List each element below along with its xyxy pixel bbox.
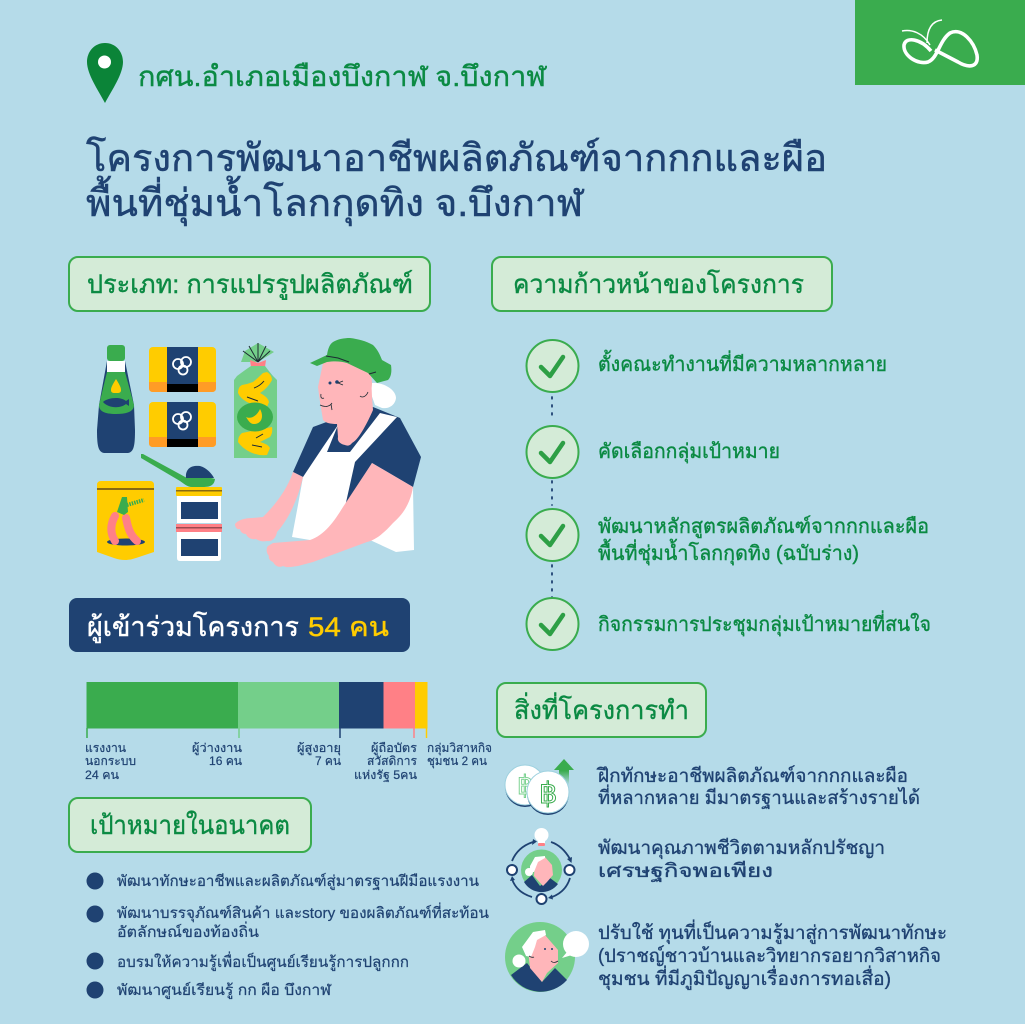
face details xyxy=(328,382,332,384)
list: future goals: อัตลักษณ์ของท้องถิ่น xyxy=(117,921,259,941)
heading: category: ประเภท: การแปรรูปผลิตภัณฑ์ xyxy=(87,269,413,300)
heading: future goals xyxy=(69,798,311,852)
bar label: welfare card holders xyxy=(354,741,418,782)
heading: future goals: เป้าหมายในอนาคต xyxy=(90,810,290,840)
banner: participants: ผู้เข้าร่วมโครงการ xyxy=(87,612,299,643)
step 4: กิจกรรมการประชุมกลุ่มเป้าหมายที่สนใจ xyxy=(598,610,931,637)
step 3: พื้นที่ชุ่มน้ำโลกกุดทิง (ฉบับร่าง) xyxy=(598,539,859,566)
bar label: elderly: ผู้สูงอายุ xyxy=(297,741,341,756)
step 3: พัฒนาหลักสูตรผลิตภัณฑ์จากกกและผือ xyxy=(598,515,929,539)
apron xyxy=(292,413,414,552)
heading: what the project does xyxy=(497,683,706,737)
step 1: ตั้งคณะทำงานที่มีความหลากหลาย xyxy=(598,350,887,376)
icon: coins with arrow xyxy=(505,759,574,815)
bar label: welfare card holders: สวัสดิการ xyxy=(367,754,418,768)
bar label: welfare card holders: แห่งรัฐ 5คน xyxy=(354,768,417,782)
bar label: unemployed: ผู้ว่างงาน xyxy=(192,741,242,756)
action text 1: ที่หลากหลาย มีมาตรฐานและสร้างรายได้ xyxy=(598,784,920,809)
title: โครงการพัฒนาอาชีพผลิตภัณฑ์จากกกและผือ xyxy=(86,136,827,180)
step 2 xyxy=(526,426,780,478)
bar label: informal workers: 24 คน xyxy=(85,768,119,782)
left arm and hand xyxy=(235,472,303,541)
ear xyxy=(362,373,372,396)
banner: participants: 54 คน xyxy=(308,612,389,642)
icon: jars xyxy=(176,487,222,561)
body shirt xyxy=(293,407,421,507)
icon: box two xyxy=(149,402,216,447)
title xyxy=(86,136,827,226)
heading: category xyxy=(69,257,430,311)
bar label: elderly: 7 คน xyxy=(315,754,341,768)
list: future goals: อบรมให้ความรู้เพื่อเป็นศูนย์เรียนรู้การปลูกกก xyxy=(117,951,409,971)
step 4 xyxy=(526,598,931,650)
bar label: community enterprise xyxy=(427,741,492,769)
icon: location pin xyxy=(87,43,123,103)
action text 1: ฝึกทักษะอาชีพผลิตภัณฑ์จากกกและผือ xyxy=(596,765,908,787)
icon: coins with arrow: ฿ xyxy=(539,778,557,810)
illustration: woman in apron xyxy=(235,338,421,567)
hat xyxy=(310,338,391,383)
icon: tamarind pouch xyxy=(97,481,154,560)
location heading: กศน.อำเภอเมืองบึงกาฬ จ.บึงกาฬ xyxy=(138,61,547,92)
icon: banana snack bag xyxy=(234,343,277,458)
bar label: welfare card holders: ผู้ถือบัตร xyxy=(371,741,418,756)
heading: what the project does: สิ่งที่โครงการทำ xyxy=(514,692,689,725)
action text 3: ปรับใช้ ทุนที่เป็นความรู้มาสู่การพัฒนาทักษะ xyxy=(598,919,947,945)
action text 3 xyxy=(598,919,947,991)
timeline: project progress xyxy=(526,340,931,650)
step 2: คัดเลือกกลุ่มเป้าหมาย xyxy=(598,441,780,464)
stacked bar chart: participants xyxy=(85,682,492,782)
list: future goals: พัฒนาบรรจุภัณฑ์สินค้า และstory ของผลิตภัณฑ์ที่สะท้อน xyxy=(117,902,489,923)
icon: fish sauce bottle xyxy=(97,345,135,453)
bar label: informal workers: แรงงาน xyxy=(85,741,126,755)
action text 2: เศรษฐกิจพอเพียง xyxy=(598,860,773,882)
right arm and hand xyxy=(267,463,413,567)
action text 3: ชุมชน ที่มีภูมิปัญญาเรื่องการทอเสื่อ) xyxy=(598,965,891,991)
banner: participants xyxy=(69,598,410,652)
step 3 xyxy=(526,509,929,566)
icon: box one xyxy=(149,347,216,392)
heading: project progress: ความก้าวหน้าของโครงการ xyxy=(513,269,804,299)
title: พื้นที่ชุ่มน้ำโลกกุดทิง จ.บึงกาฬ xyxy=(86,175,585,226)
action text 1 xyxy=(596,765,920,809)
list: future goals: พัฒนาทักษะอาชีพและผลิตภัณฑ์สู่มาตรฐานฝีมือแรงงาน xyxy=(117,873,479,890)
icon: spoon of powder xyxy=(141,454,215,487)
step 1 xyxy=(526,340,887,392)
icon: cycle with lightbulb xyxy=(507,828,574,904)
list: future goals xyxy=(86,872,489,999)
icon: elder with speech bubble xyxy=(505,922,589,992)
bar label: informal workers xyxy=(85,741,136,782)
bar label: unemployed xyxy=(192,741,242,768)
action text 2 xyxy=(598,837,885,882)
action text 3: (ปราชญ์ชาวบ้านและวิทยากรอยากวิสาหกิจ xyxy=(598,945,941,967)
illustration: products xyxy=(97,343,277,561)
hair and bun xyxy=(345,363,396,408)
bar label: community enterprise: ชุมชน 2 คน xyxy=(427,754,487,769)
bar label: informal workers: นอกระบบ xyxy=(85,754,136,768)
list: future goals: พัฒนาศูนย์เรียนรู้ กก ผือ บึงกาฬ xyxy=(117,982,332,999)
heading: project progress xyxy=(492,257,832,311)
action text 2: พัฒนาคุณภาพชีวิตตามหลักปรัชญา xyxy=(598,837,885,860)
bar label: unemployed: 16 คน xyxy=(209,754,242,768)
bar label: elderly xyxy=(297,741,341,768)
icon: coins with arrow: ฿ xyxy=(517,770,534,800)
logo block xyxy=(855,0,1025,85)
neck and face xyxy=(318,361,373,446)
bar label: community enterprise: กลุ่มวิสาหกิจ xyxy=(427,741,492,756)
